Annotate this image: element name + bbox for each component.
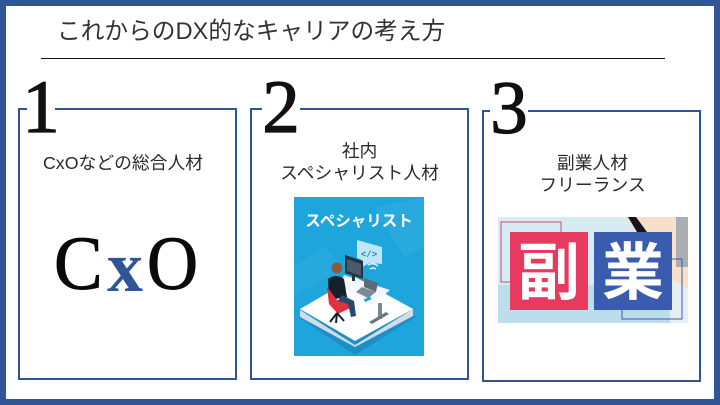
number 2 with mask [262,78,300,134]
number 1 with mask [27,78,55,134]
label: specialist: 社内 [342,141,377,161]
title: これからのDX的なキャリアの考え方 [57,19,445,45]
image: side job banner: 業 [602,222,664,312]
image: specialist illustration: </> [361,250,377,260]
panel: 1 CxO [18,108,237,380]
image characters: 副 [518,222,580,312]
logo: CxO [54,222,198,307]
number 3 with mask [490,78,528,136]
logo: CxO: O [147,222,198,306]
number 1 with mask: 1 [22,66,60,149]
label: side job: フリーランス [539,175,646,195]
label: CxO: CxOなどの総合人材 [43,153,203,173]
panel: 3 side job [482,110,701,382]
image: side job banner [498,217,688,323]
logo: CxO: x [107,227,143,307]
label: side job: 副業人材 [557,153,628,173]
number 3 with mask: 3 [490,67,528,150]
panel: 2 specialist [250,108,469,380]
logo: CxO: C [54,222,103,306]
number 2 with mask: 2 [262,66,300,149]
label: specialist: スペシャリスト人材 [280,163,439,183]
image: specialist illustration [294,197,424,356]
label: side job [539,153,646,195]
image heading: スペシャリスト [305,213,413,230]
title underline [41,58,665,59]
label: specialist [280,141,439,183]
